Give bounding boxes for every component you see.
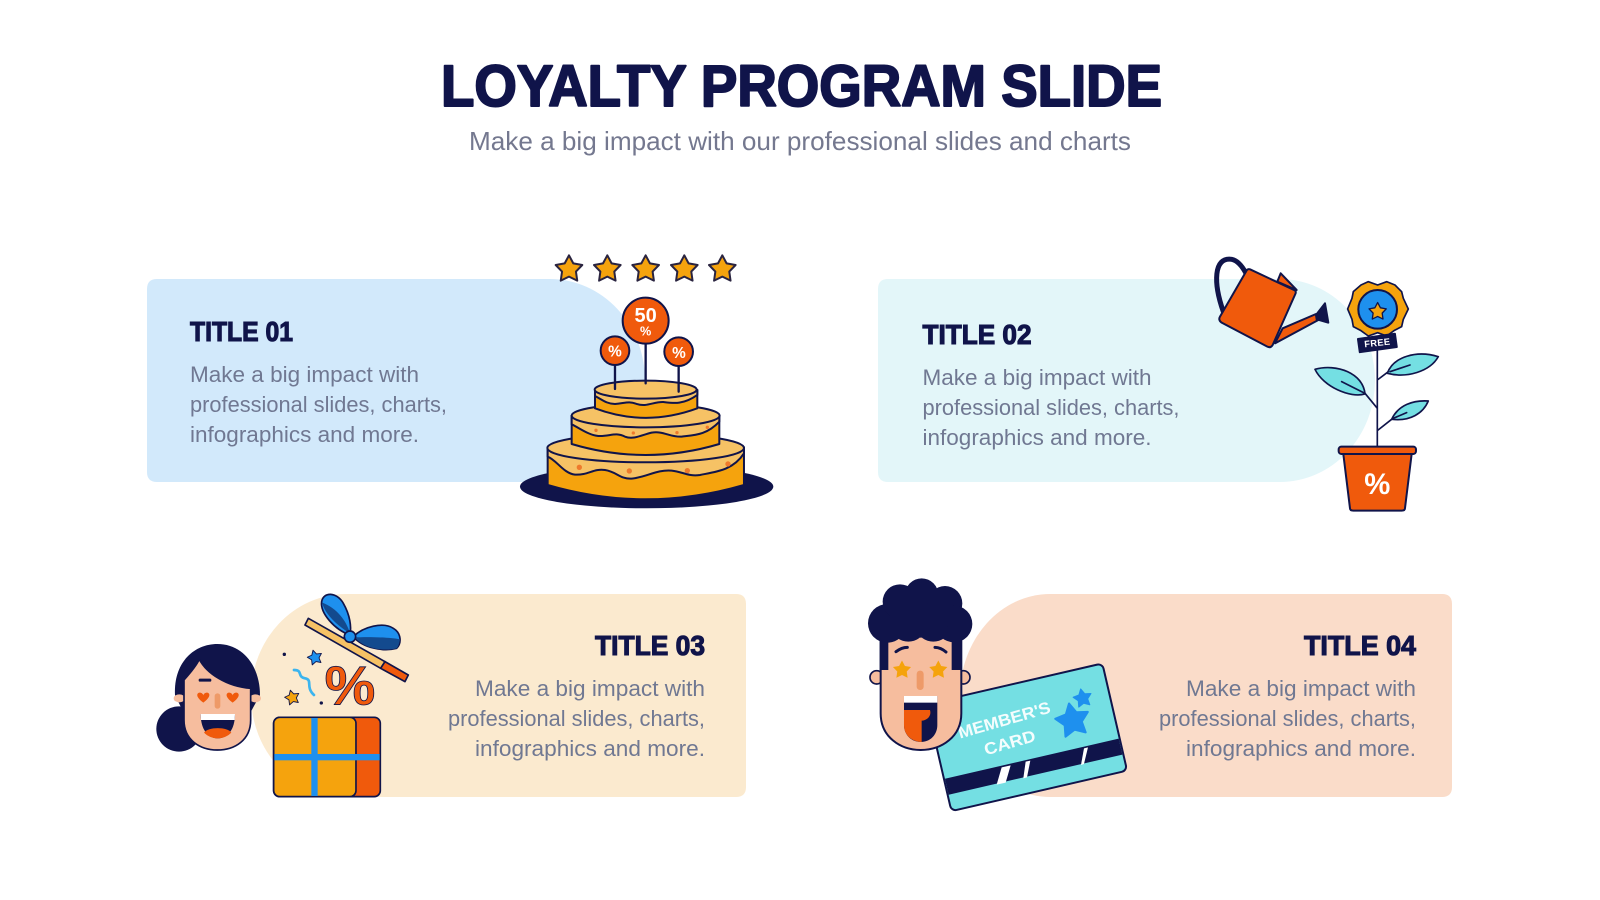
icon: flower pot with free badge: %: [1364, 468, 1390, 501]
panel: title 01: [147, 279, 645, 482]
text block: title 03 body: professional slides, charts,: [448, 706, 705, 731]
icon: birthday cake with discount toppers: %: [640, 324, 651, 338]
text block: title 03 body: Make a big impact with: [475, 676, 705, 701]
text block: title 01 body: [190, 362, 447, 447]
text block: title 04 body: [1159, 676, 1416, 761]
panel: title 04: [960, 594, 1452, 797]
text block: title 02 body: professional slides, charts,: [922, 395, 1180, 420]
icon: flower pot with free badge: FREE: [1364, 337, 1391, 349]
text block: title 02 body: infographics and more.: [922, 425, 1152, 450]
text block: title 01 body: infographics and more.: [190, 422, 419, 447]
text block: title 01 body: professional slides, charts,: [190, 392, 447, 417]
subtitle: Make a big impact with our professional slides and charts: [469, 126, 1131, 156]
icon: member's card: CARD: [982, 726, 1038, 759]
text block: title 01 body: Make a big impact with: [190, 362, 419, 387]
text block: title 03 body: infographics and more.: [475, 736, 705, 761]
icon: birthday cake with discount toppers: %: [608, 343, 622, 360]
panel: title 03: [251, 594, 746, 797]
icon: flower pot with free badge: [1315, 282, 1438, 511]
text block: title 02 body: Make a big impact with: [922, 365, 1152, 390]
heading: title 03: TITLE 03: [595, 630, 705, 661]
icon: watering can: [1217, 259, 1328, 347]
text block: title 04 body: infographics and more.: [1186, 736, 1416, 761]
icon: birthday cake with discount toppers: [520, 298, 773, 508]
icon: five rating stars: [556, 255, 736, 281]
heading: title 01: TITLE 01: [190, 316, 293, 347]
heading: title 04: TITLE 04: [1304, 630, 1417, 661]
icon: birthday cake with discount toppers: 50: [635, 305, 657, 327]
heading: title 02: TITLE 02: [922, 319, 1032, 350]
text block: title 04 body: professional slides, charts,: [1159, 706, 1416, 731]
icon: excited man with star eyes: [868, 578, 972, 750]
icon: open gift box with percent sign: %: [325, 655, 375, 717]
icon: birthday cake with discount toppers: %: [672, 345, 686, 362]
text block: title 02 body: [922, 365, 1180, 450]
panel: title 02: [878, 279, 1375, 482]
text block: title 04 body: Make a big impact with: [1186, 676, 1416, 701]
icon: smiling woman with heart eyes: [156, 644, 261, 752]
icon: open gift box with percent sign: [274, 594, 408, 797]
title: LOYALTY PROGRAM SLIDE: [441, 54, 1162, 119]
icon: member's card: [927, 663, 1127, 811]
text block: title 03 body: [448, 676, 705, 761]
icon: member's card: MEMBER'S: [956, 698, 1053, 742]
